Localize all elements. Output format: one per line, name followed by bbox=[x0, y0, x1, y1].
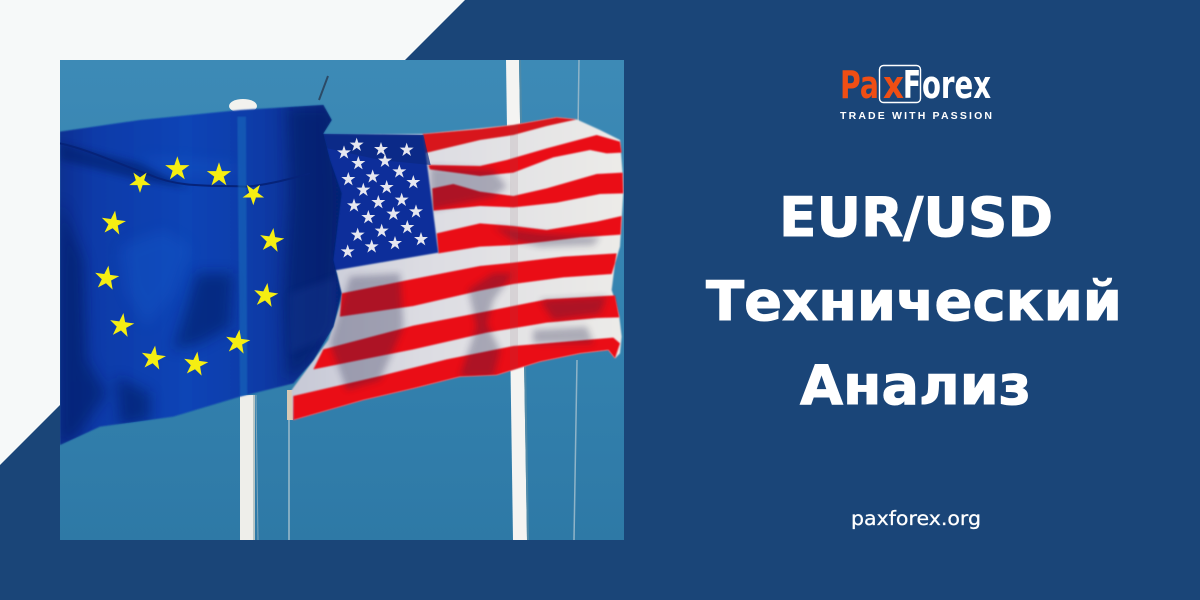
logo F letter: F bbox=[903, 63, 921, 107]
US flag shadows bbox=[330, 120, 607, 390]
EU flag folds and shadows bbox=[60, 107, 340, 443]
US flag stars bbox=[337, 138, 428, 258]
EU flag yellow stars bbox=[93, 156, 286, 376]
flagpoles and rigging bbox=[229, 60, 579, 540]
logo wordmark orange: Pa bbox=[840, 63, 879, 107]
EU flag field bbox=[60, 105, 342, 445]
title: EUR/USD Технический Анализ bbox=[706, 186, 1122, 417]
sky bbox=[60, 60, 624, 540]
title line 1: EUR/USD bbox=[779, 186, 1053, 249]
logo wordmark white: orex bbox=[922, 63, 991, 107]
logo box bbox=[880, 66, 920, 102]
EU flag bbox=[60, 105, 342, 445]
logo x letter: x bbox=[883, 63, 904, 107]
logo: PaxForex bbox=[840, 63, 992, 122]
title line 3: Анализ bbox=[800, 354, 1031, 417]
US flag white field bbox=[292, 117, 623, 420]
pole seen through flag bbox=[237, 117, 247, 397]
US flag canton bbox=[313, 134, 438, 271]
US flag bbox=[292, 117, 623, 420]
logo tagline: TRADE WITH PASSION bbox=[840, 110, 992, 122]
title line 2: Технический bbox=[706, 270, 1122, 333]
photo: EU and US flags bbox=[60, 60, 624, 540]
background: light corner triangle bbox=[0, 0, 465, 465]
website url: paxforex.org bbox=[851, 507, 981, 530]
US flag red stripes bbox=[293, 117, 623, 420]
